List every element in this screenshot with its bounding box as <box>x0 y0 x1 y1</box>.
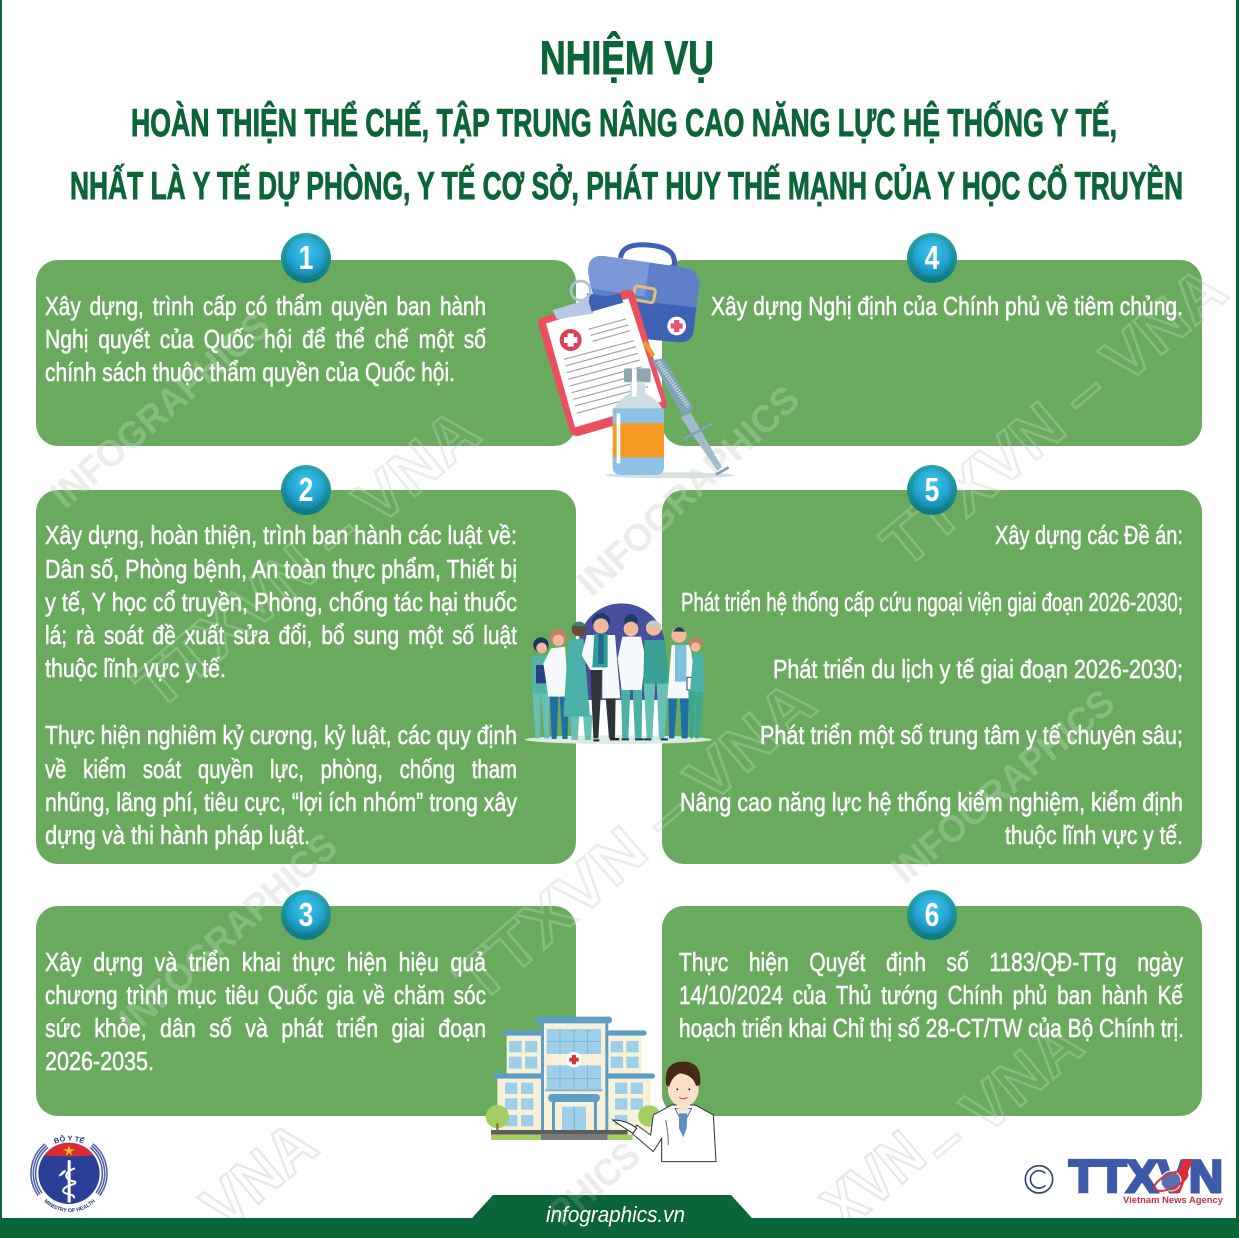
panel 2: Thực hiện nghiêm kỷ cương, kỷ luật, các quy định <box>45 720 517 750</box>
badge 3: 3 <box>299 897 313 934</box>
badge 2 <box>281 465 331 515</box>
panel 2: Dân số, Phòng bệnh, An toàn thực phẩm, Thiết bị <box>45 554 517 584</box>
panel 1: chính sách thuộc thẩm quyền của Quốc hội. <box>45 357 455 387</box>
panel 2: thuộc lĩnh vực y tế. <box>45 653 226 683</box>
watermark on white background: TTXVN – VNA <box>442 666 829 1016</box>
watermark on white background: – VNA <box>908 1007 1096 1181</box>
panel 1: Nghị quyết của Quốc hội để thể chế một số <box>45 324 486 354</box>
watermark over panels: TTXVN – VNA <box>442 666 829 1016</box>
panel 1: Xây dựng, trình cấp có thẩm quyền ban hành <box>45 291 486 321</box>
badge 1: 1 <box>299 240 313 277</box>
logo: TTXVN Vietnam News Agency: Vietnam News Agency <box>1123 1195 1224 1206</box>
watermark on white background: PHICS <box>541 1134 648 1235</box>
footer bar: infographics.vn <box>546 1202 685 1227</box>
watermark over panels: INFOGRAPHICS <box>569 378 808 605</box>
watermark over panels: TTXVN – VNA <box>868 252 1239 581</box>
badge 5: 5 <box>925 472 939 509</box>
badge 2: 2 <box>299 472 313 509</box>
footer bar: PHICS <box>541 1134 648 1235</box>
logo: Ministry of Health <box>30 1134 108 1212</box>
watermark over panels: INFOGRAPHICS <box>884 682 1123 892</box>
watermark over panels: INFOGRAPHICS <box>112 825 346 1042</box>
icon: doctor gesturing <box>613 1062 716 1162</box>
right male doctor <box>667 627 699 738</box>
panel 3: Xây dựng và triển khai thực hiện hiệu quả <box>45 947 486 977</box>
title block: NHIỆM VỤ <box>540 31 714 84</box>
badge 6: 6 <box>925 897 939 934</box>
panel 5 <box>662 490 1202 864</box>
far-left nurse <box>532 637 550 738</box>
panel 2: Xây dựng, hoàn thiện, trình ban hành các luật về: <box>45 520 517 550</box>
title block <box>70 31 1183 208</box>
panel 2: về kiểm soát quyền lực, phòng, chống tham <box>45 754 517 784</box>
badge 4: 4 <box>925 240 940 277</box>
male nurse with cap <box>643 620 669 740</box>
panel 4 <box>662 260 1202 446</box>
panel 2 <box>36 490 576 864</box>
icon: medical team <box>525 603 712 744</box>
woman doctor arms crossed <box>618 614 646 740</box>
watermark over panels: – VNA <box>908 1007 1096 1181</box>
badge 5 <box>907 465 957 515</box>
watermark over panels <box>43 252 1239 1181</box>
watermark on white background: INFOGRAPHICS <box>569 378 808 605</box>
left doctor woman <box>543 629 568 739</box>
badge 1 <box>281 233 331 283</box>
panel 3 <box>36 906 576 1116</box>
panel 2: y tế, Y học cổ truyền, Phòng, chống tác hại thuốc <box>45 587 517 617</box>
watermark on white background: TTXVN – VNA <box>868 252 1239 581</box>
watermark on white background: TTXVN – VNA <box>121 394 493 723</box>
watermark on white background: INFOGRAPHICS <box>884 682 1123 892</box>
panel 5: Xây dựng các Đề án: <box>995 520 1183 550</box>
watermark on white background <box>43 252 1239 1238</box>
panel 5: thuộc lĩnh vực y tế. <box>1005 820 1183 850</box>
panel 3: sức khỏe, dân số và phát triển giai đoạn <box>45 1013 486 1043</box>
badge 6 <box>907 890 957 940</box>
panel 2: lá; rà soát đề xuất sửa đổi, bổ sung một số luật <box>45 620 518 650</box>
panel 3: 2026-2035. <box>45 1046 154 1076</box>
panel 2: nhũng, lãng phí, tiêu cực, “lợi ích nhóm” trong xây <box>45 787 517 817</box>
icon: copyright <box>1025 1166 1053 1193</box>
tall surgeon <box>563 622 592 740</box>
far-right nurse <box>688 638 705 738</box>
panel 2: dựng và thi hành pháp luật. <box>45 820 310 850</box>
watermark over panels: INFOGRAPHICS <box>43 305 278 517</box>
watermark on white background: INFOGRAPHICS <box>43 305 278 517</box>
logo: TTXVN Vietnam News Agency: TTXVN <box>1069 1151 1223 1202</box>
panel 6 <box>662 906 1202 1116</box>
badge 4 <box>907 233 957 283</box>
watermark on white background: INFOGRAPHICS <box>112 825 346 1042</box>
icon: medical bag, clipboard, bottle and syringe <box>538 245 735 478</box>
logo: Ministry of Health: BỘ Y TẾ <box>54 1134 85 1144</box>
badge 3 <box>281 890 331 940</box>
watermark over panels: TTXVN – VNA <box>121 394 493 723</box>
panel 1 <box>36 260 576 446</box>
icon: hospital building <box>486 1017 661 1140</box>
central male doctor <box>582 613 620 741</box>
panel 3: chương trình mục tiêu Quốc gia về chăm sóc <box>45 980 486 1010</box>
logo: Ministry of Health: MINISTRY OF HEALTH <box>44 1199 96 1212</box>
footer bar <box>0 1134 1239 1238</box>
